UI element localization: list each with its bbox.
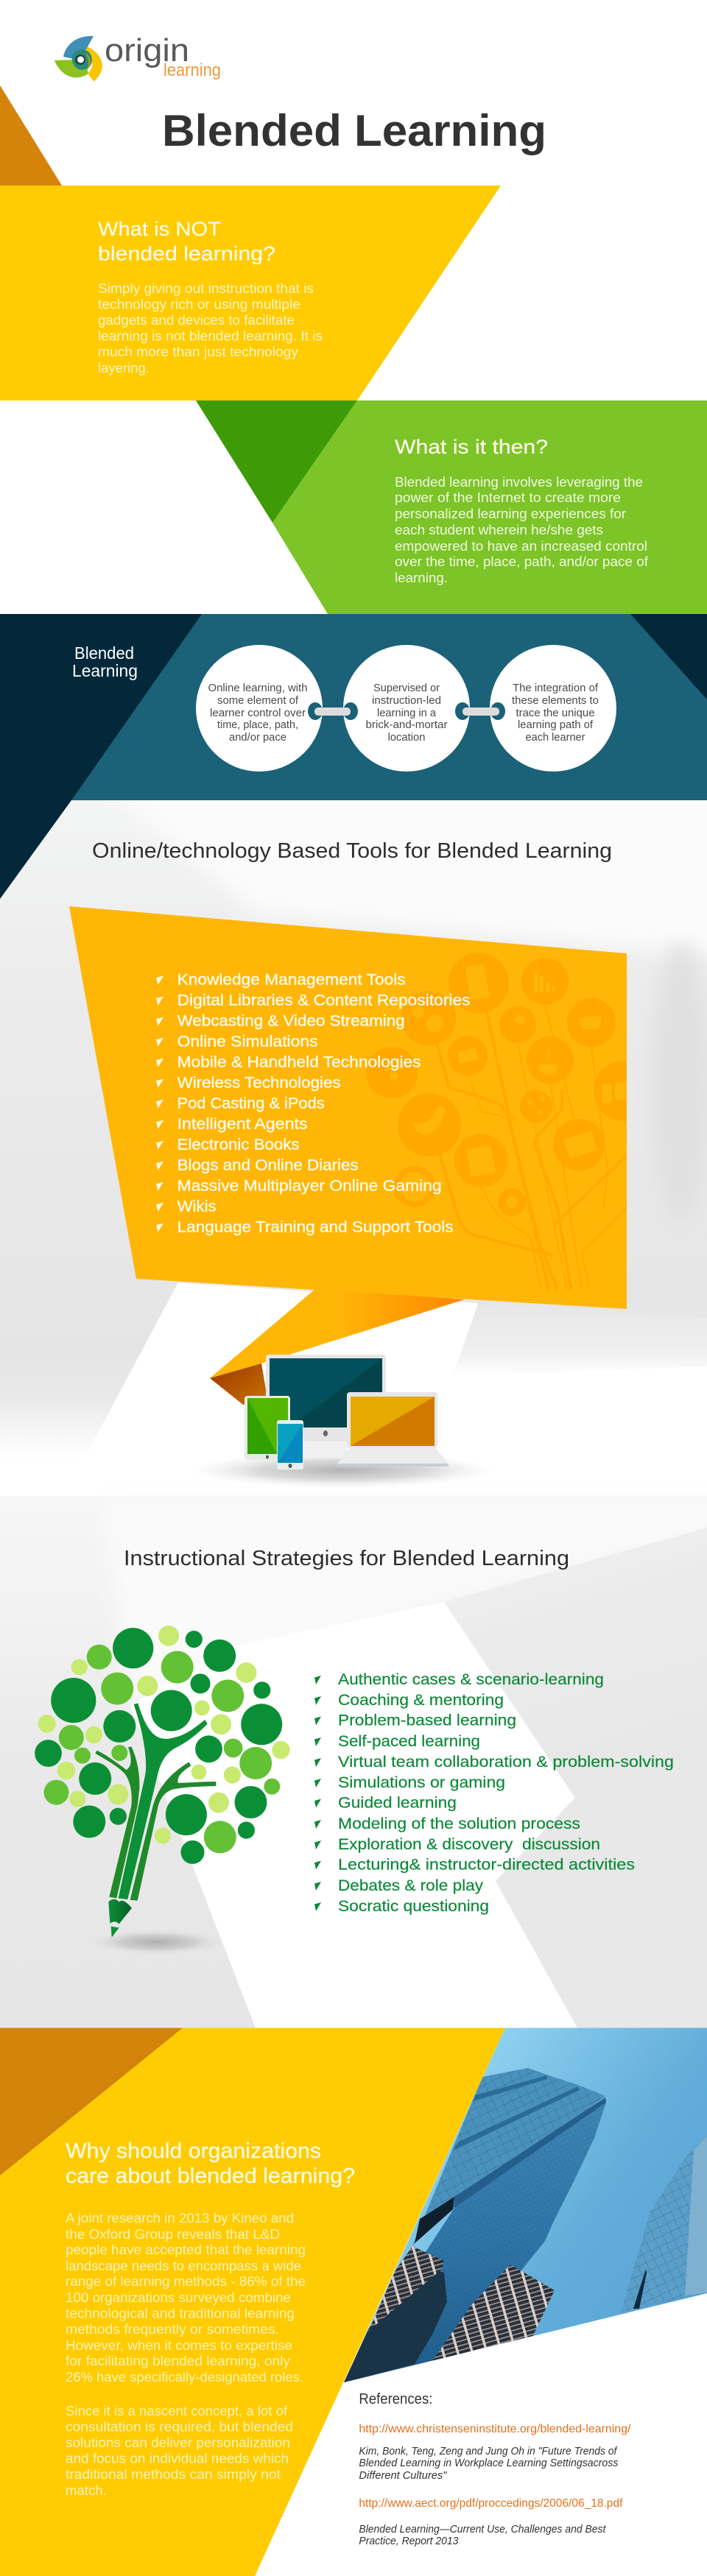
body paragraph 1: landscape needs to encompass a wide [66,2259,301,2273]
list item: Pod Casting & iPods [177,1095,325,1112]
icon: tablet [245,1396,290,1460]
icon: smartphone [277,1420,303,1469]
icon: logo swirl [54,36,102,82]
list item: Massive Multiplayer Online Gaming [177,1178,442,1194]
body text: Simply giving out instruction that is [98,281,314,296]
list item: Modeling of the solution process [338,1815,580,1832]
body paragraph 1: 26% have specifically-designated roles. [66,2370,303,2385]
list item: Guided learning [338,1795,457,1812]
body paragraph 2: match. [66,2483,107,2498]
circle: online learning: and/or pace [229,731,286,744]
references [359,2391,631,2547]
reference link 1: http://www.christenseninstitute.org/blended-learning/ [359,2423,631,2435]
circle: instructor-led: learning in a [377,707,437,719]
panel: what is not blended learning [0,85,501,400]
green panel shape [272,400,707,614]
circle: instructor-led: instruction-led [372,694,441,707]
label: Learning [72,661,138,680]
body paragraph 2: consultation is required, but blended [66,2419,293,2434]
list item: Simulations or gaming [338,1774,505,1791]
list item: Webcasting & Video Streaming [177,1013,405,1029]
tree leaf circles [35,1626,290,1864]
body paragraph 1: technological and traditional learning [66,2306,295,2321]
yellow panel shape [69,906,627,1309]
lattice tower right [432,2265,555,2361]
panel: instructional strategies background [0,1496,707,2028]
dark navy background [0,614,707,800]
list item: Knowledge Management Tools [177,972,406,988]
list item: Self-paced learning [338,1733,480,1750]
orange corner triangle [0,2028,183,2176]
circle: integration: learning path of [518,719,594,731]
icon: laptop [337,1392,449,1467]
body text: layering. [98,361,150,375]
list item: Socratic questioning [338,1898,489,1915]
body paragraph 1: people have accepted that the learning [66,2242,306,2257]
reference citation 2: Blended Learning—Current Use, Challenges and Best [359,2523,606,2536]
list item: Debates & role play [338,1877,484,1894]
body text: power of the Internet to create more [395,490,621,505]
strategies list [314,1671,674,1915]
body paragraph 1: However, when it comes to expertise [66,2338,292,2353]
list item: Online Simulations [177,1034,318,1050]
circle: integration: each learner [526,731,585,744]
teal shape [71,614,707,800]
yellow panel shape [0,2028,505,2576]
reference citation 1: Different Cultures" [359,2469,447,2482]
panel: what is it then [196,400,707,614]
heading: care about blended learning? [66,2164,355,2188]
panel: blended learning components [0,614,707,899]
reference link 2: http://www.aect.org/pdf/proccedings/2006/06_18.pdf [359,2497,623,2510]
circle: online learning: time, place, path, [217,719,298,731]
circle: integration: these elements to [512,694,599,707]
right tower [621,2136,707,2312]
list item: Lecturing& instructor-directed activities [338,1857,635,1874]
heading: What is NOT [98,218,221,240]
circle: integration: trace the unique [516,707,595,719]
main title: Blended Learning [162,106,546,155]
body paragraph 1: for facilitating blended learning, only [66,2354,290,2368]
body text: learning is not blended learning. It is [98,328,323,343]
orange corner triangle [0,85,62,186]
list item: Exploration & discovery discussion [338,1836,600,1853]
body text: gadgets and devices to facilitate [98,313,295,328]
logo: origin learning [54,32,221,82]
body text: empowered to have an increased control [395,539,647,554]
list item: Blogs and Online Diaries [177,1157,359,1174]
body text: much more than just technology [98,345,298,359]
body text: Blended learning involves leveraging the [395,475,643,490]
label: Blended [74,643,134,663]
body paragraph 2: and focus on individual needs which [66,2452,289,2466]
reference citation 1: Blended Learning in Workplace Learning Settingsacross [359,2457,619,2469]
dark green triangle [196,400,357,523]
body paragraph 1: methods frequently or sometimes. [66,2322,279,2337]
sky [339,2028,707,2388]
dark tower reflection [344,2263,447,2382]
devices shadow [191,1453,493,1488]
logo sub-wordmark: learning [163,60,221,80]
body paragraph 1: A joint research in 2013 by Kineo and [66,2211,294,2226]
logo wordmark: origin [105,32,189,68]
circle: instructor-led [343,645,470,772]
references heading: References: [359,2391,432,2407]
list item: Problem-based learning [338,1712,516,1729]
body paragraph 2: solutions can deliver personalization [66,2435,290,2450]
yellow panel shape [0,186,501,400]
connector 1 [308,702,358,720]
tools heading: Online/technology Based Tools for Blended Learning [92,839,612,863]
pencil trunk branches [95,1703,216,1938]
photo: skyscrapers [339,2028,707,2388]
circle: online learning [196,645,323,772]
circle: instructor-led: location [387,731,426,744]
icon: devices illustration [191,1355,493,1488]
body text: over the time, place, path, and/or pace of [395,554,649,569]
body paragraph 2: traditional methods can simply not [66,2467,281,2482]
app icon tree decoration [366,953,654,1290]
circle: instructor-led: Supervised or [373,682,440,694]
body paragraph 1: 100 organizations surveyed combine [66,2290,291,2305]
list item: Digital Libraries & Content Repositories [177,992,471,1009]
body text: each student wherein he/she gets [395,523,603,537]
list item: Mobile & Handheld Technologies [177,1054,421,1070]
circle: instructor-led: brick-and-mortar [365,719,448,731]
reference citation 1: Kim, Bonk, Teng, Zeng and Jung Oh in "Future Trends of [359,2445,618,2457]
circle: online learning: some element of [217,694,299,707]
main tower [339,2068,606,2385]
list item [156,1199,217,1215]
heading: Why should organizations [66,2139,321,2163]
body paragraph 2: Since it is a nascent concept, a lot of [66,2404,288,2418]
speech fold behind panel [210,1288,465,1405]
lattice tower left [368,2246,444,2332]
heading: blended learning? [98,243,275,265]
circle: integration [490,645,616,772]
list item: Coaching & mentoring [338,1692,504,1709]
list item: Electronic Books [177,1137,300,1153]
body paragraph 1: the Oxford Group reveals that L&D [66,2227,280,2242]
list item: Wikis [177,1199,217,1215]
panel: tools list [69,906,654,1309]
body paragraph 1: range of learning methods - 86% of the [66,2274,306,2289]
panel: why should organizations care [0,2028,505,2576]
body text: personalized learning experiences for [395,507,626,521]
body text: technology rich or using multiple [98,297,300,312]
list item: Language Training and Support Tools [177,1219,454,1235]
panel: tools background [0,780,707,1496]
list item: Authentic cases & scenario-learning [338,1671,604,1688]
circle: online learning: Online learning, with [208,682,308,694]
icon: pencil tree illustration [35,1626,290,1955]
icon: desktop monitor [266,1355,386,1458]
body text: learning. [395,571,448,585]
reference citation 2: Practice, Report 2013 [359,2535,459,2547]
circle: online learning: learner control over [210,707,306,719]
strategies heading: Instructional Strategies for Blended Learning [124,1547,569,1570]
connector 2 [455,702,505,720]
heading: What is it then? [395,436,548,458]
pencil shadow [89,1930,225,1955]
circle: integration: The integration of [513,682,599,694]
list item: Intelligent Agents [177,1116,308,1132]
navy lower-left wedge [0,800,71,899]
list item: Virtual team collaboration & problem-solving [338,1754,674,1771]
list item: Wireless Technologies [177,1075,341,1091]
